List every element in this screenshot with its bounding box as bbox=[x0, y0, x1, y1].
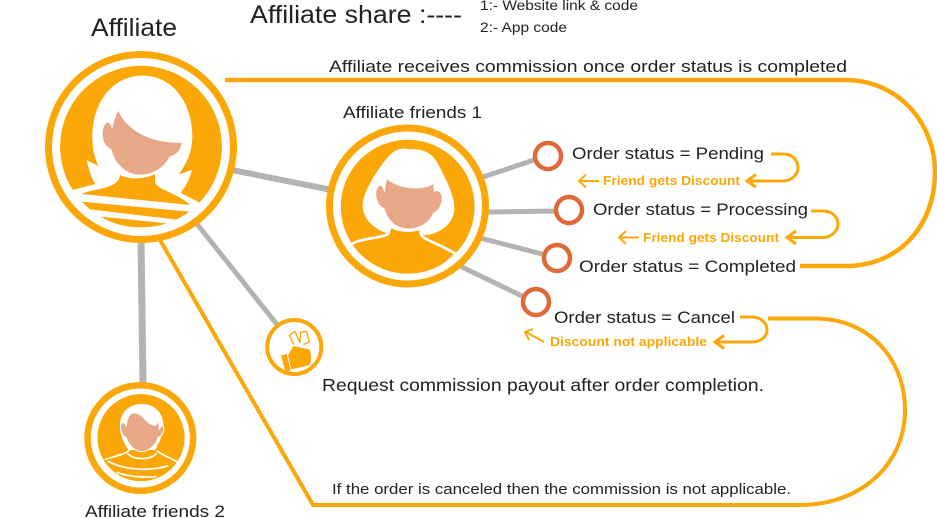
text: request payout: Request commission payout after order completion. bbox=[322, 375, 764, 395]
connector: affiliate to friend 2 bbox=[141, 238, 143, 384]
status: processing bbox=[556, 197, 838, 245]
status: cancel: Order status = Cancel bbox=[554, 308, 735, 327]
heading: Affiliate share: Affiliate share :---- bbox=[250, 1, 462, 29]
avatar: affiliate bbox=[48, 54, 238, 250]
icon: payout hand holding money bbox=[267, 320, 321, 374]
status: processing: Friend gets Discount bbox=[643, 230, 780, 245]
status: pending: Order status = Pending bbox=[572, 144, 764, 163]
text: cancelled order note: If the order is canceled then the commission is not applicable. bbox=[332, 482, 791, 498]
status: pending bbox=[535, 143, 798, 188]
heading: Affiliate: Affiliate bbox=[91, 14, 177, 42]
status: pending: Friend gets Discount bbox=[603, 173, 741, 188]
label: Affiliate friends 1: Affiliate friends 1 bbox=[343, 103, 482, 122]
status: processing: Order status = Processing bbox=[593, 200, 808, 219]
avatar: friend 1 bbox=[330, 128, 486, 287]
status: completed: Order status = Completed bbox=[579, 257, 796, 276]
status: cancel bbox=[523, 289, 767, 349]
commission completed flow line bbox=[225, 80, 935, 266]
connector: affiliate to friend 1 bbox=[232, 170, 332, 190]
text: commission received: Affiliate receives commission once order status is completed bbox=[329, 57, 847, 76]
commission cancelled flow line bbox=[160, 240, 905, 505]
status: cancel: Discount not applicable bbox=[550, 334, 707, 349]
share option 2: 2:- App code bbox=[480, 20, 567, 35]
connector: affiliate to payout icon bbox=[197, 224, 279, 327]
avatar: friend 2 bbox=[88, 385, 193, 491]
status: completed bbox=[544, 245, 796, 276]
connectors: friend 1 to order statuses bbox=[460, 159, 557, 298]
